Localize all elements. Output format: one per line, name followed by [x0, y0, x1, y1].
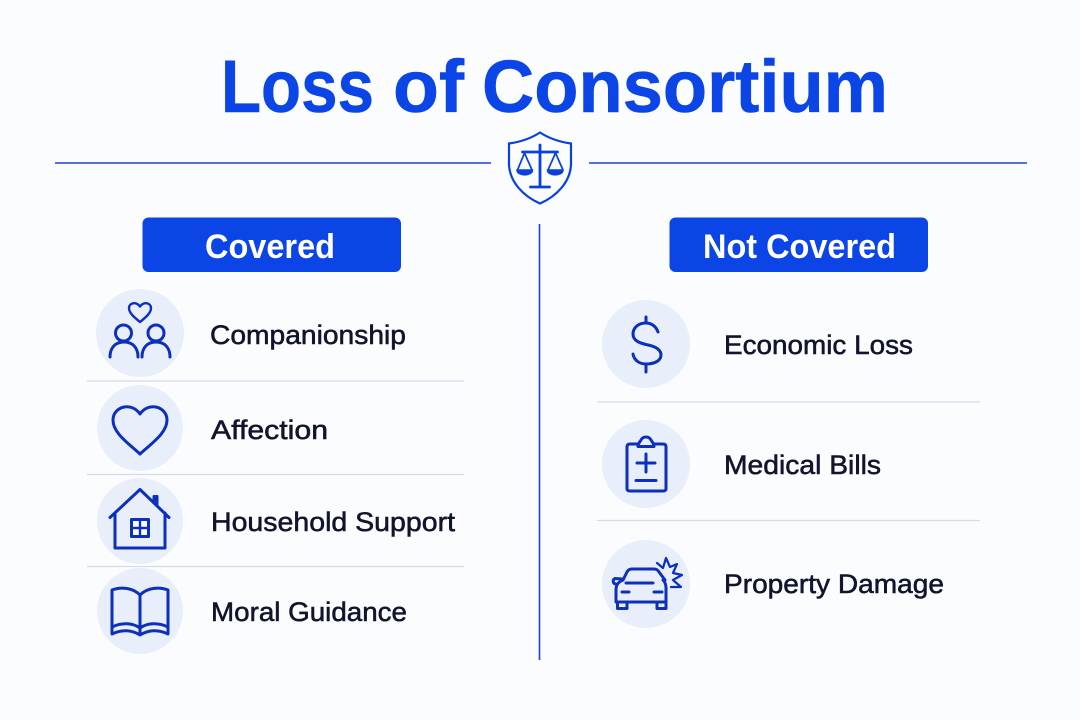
item: Medical Bills: [602, 420, 881, 508]
item: Moral Guidance: Moral Guidance: [211, 597, 407, 627]
item: Property Damage: [602, 540, 944, 628]
title: Loss: [221, 45, 374, 128]
item: Companionship: [96, 289, 406, 377]
icon: open book: [112, 588, 168, 635]
item: Companionship: Companionship: [210, 320, 406, 350]
item: Property Damage: Property Damage: [724, 569, 944, 599]
item: Economic Loss: Economic Loss: [724, 330, 913, 360]
item: Affection: Affection: [211, 415, 328, 445]
item: Moral Guidance: [97, 568, 407, 654]
icon: two people and a heart: [110, 303, 170, 357]
icon: heart: [113, 407, 167, 454]
icon: clipboard: [627, 437, 666, 491]
title: Consortium: [482, 45, 888, 128]
icon: shield with scales of justice: [509, 132, 571, 204]
title: of: [393, 45, 464, 128]
item: Household Support: [97, 478, 456, 564]
heading: Not Covered: [670, 218, 928, 272]
right header rule: [589, 162, 1027, 164]
item: Affection: [97, 385, 328, 471]
panel: covered: [87, 218, 464, 654]
heading: Covered: [142, 218, 401, 272]
item: Household Support: Household Support: [211, 507, 456, 537]
heading: Covered: Covered: [205, 228, 335, 266]
left header rule: [55, 162, 491, 164]
icon: house: [110, 490, 169, 548]
item: Economic Loss: [602, 300, 913, 388]
icon: car with impact burst: [613, 558, 682, 608]
panel: not covered: [597, 218, 980, 628]
heading: Not Covered: Not Covered: [703, 228, 896, 266]
title: [221, 45, 888, 128]
icon: dollar sign: [633, 317, 661, 372]
center divider: [538, 224, 540, 660]
item: Medical Bills: Medical Bills: [724, 450, 881, 480]
